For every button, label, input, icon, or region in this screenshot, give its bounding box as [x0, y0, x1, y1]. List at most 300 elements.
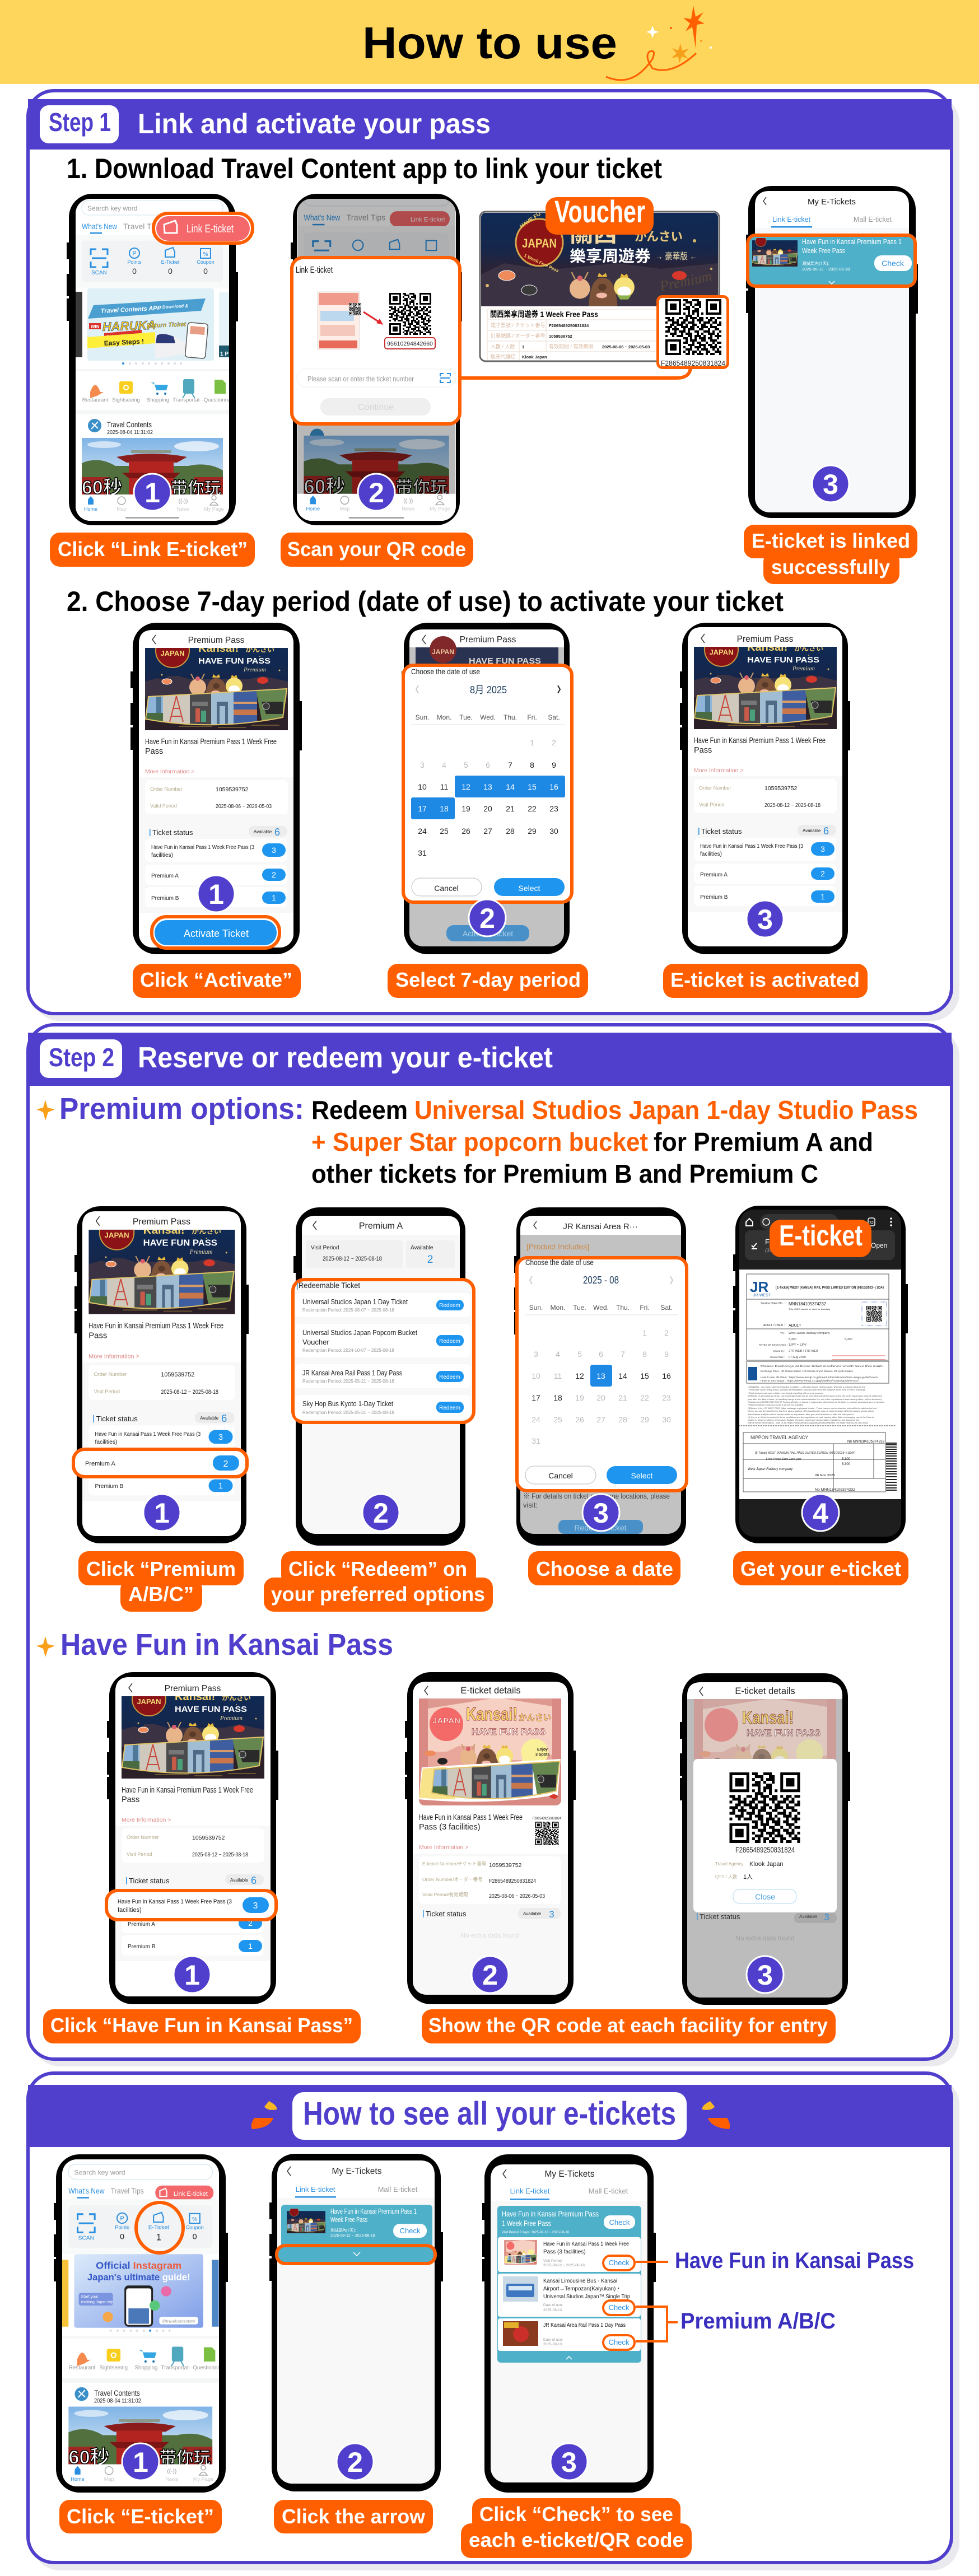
voucher image: → 豪華版 ←: [655, 251, 697, 262]
dialog: choose date of use: 7: [508, 760, 512, 769]
caption: click link e-ticket: Click “Link E-ticket”: [58, 538, 248, 561]
highlight: link e-ticket button: [153, 213, 253, 243]
header band with title pill: How to see all your e-tickets: [303, 2096, 676, 2132]
app home screen: Search key word: [87, 204, 137, 212]
dialog: choose the date: 3: [534, 1350, 538, 1359]
step number 2: 2: [482, 1959, 498, 1991]
voucher image: 關西: [570, 223, 617, 247]
app home screen: %: [192, 2216, 197, 2223]
screen: premium pass details activated: Order Number: [699, 785, 731, 791]
screen: premium pass: Have Fun in Kansai Premium Pass 1 Week Free: [122, 1786, 253, 1795]
screen: premium pass: Order Number: [127, 1835, 159, 1840]
dialog: link e-ticket: [292, 258, 460, 424]
phone: e-ticket details: No extra data found: [460, 1931, 520, 1939]
app home screen: Travel Tips: [123, 222, 161, 231]
text: premium options: other tickets for Premium B and Premium C: [311, 1159, 818, 1188]
caption: click check: Click “Check” to see: [479, 2503, 673, 2526]
caption: click premium a/b/c: A/B/C”: [128, 1583, 194, 1606]
app home screen: Easy Steps !: [104, 337, 144, 347]
app home screen: Restaurant: [82, 397, 109, 403]
caption: click have fun in kansai pass: Click “Have Fun in Kansai Pass”: [50, 2014, 353, 2037]
phone: choose a date: JR Kansai Area R···: [563, 1222, 638, 1231]
e-ticket document: Exchange Place : JR-Osaka Station / JR Kansai Airport Station / JR Kyoto Station: [761, 1370, 853, 1373]
e-ticket document: This eMCO cannot be used for boarding: [789, 1308, 830, 1310]
dialog: choose the date: 24: [532, 1415, 540, 1424]
dialog: choose the date: Tue.: [573, 1304, 586, 1312]
app home screen dimmed: [297, 184, 455, 521]
screen: premium pass details: Kansai!: [198, 642, 239, 655]
step number 3: 3: [593, 1497, 609, 1529]
dialog: choose the date: 8: [642, 1350, 647, 1359]
phone: click the arrow: Mall E-ticket: [378, 2185, 418, 2194]
step number 3: [582, 1494, 619, 1531]
dialog: choose date of use: 11: [440, 782, 448, 791]
phone: e-ticket details: F2865489250831824: [533, 1817, 562, 1821]
highlight: link e-ticket button: Link E-ticket: [187, 223, 234, 235]
voucher image: 人數 / 人数: [491, 343, 515, 349]
highlight: premium a row: 2: [223, 1459, 229, 1469]
e-ticket document: **Each person must need a ticket even though travelling with several persons.: [748, 1392, 823, 1394]
highlight: have fun in kansai pass row: Have Fun in Kansai Pass 1 Week Free Pass (3: [118, 1898, 232, 1905]
screen: premium pass details activated: Premium B: [700, 894, 728, 900]
e-ticket document: No MNN184105374232: [847, 1440, 884, 1444]
dialog: choose the date: 14: [618, 1371, 627, 1380]
e-ticket document: [4] Use of an Order is subject to these conditions and the regulations of each issuing office. After exchanging, use of the Pass is: [748, 1416, 874, 1418]
dialog: choose date of use: Cancel: [434, 884, 459, 893]
dialog: choose date of use: 3: [420, 760, 425, 769]
dialog: choose date of use: 19: [461, 804, 470, 813]
header band: step 1: Link and activate your pass: [138, 108, 491, 139]
screen: premium pass details: 1059539752: [216, 786, 249, 793]
e-ticket document: ADULT / CHILD :: [763, 1324, 785, 1327]
ticket card: Check: [400, 2227, 421, 2235]
ticket card: Week Free Pass: [330, 2216, 367, 2224]
pass artwork: pink: Kansai!: [466, 1704, 518, 1724]
highlight: redeemable ticket list: Redeem: [439, 1405, 460, 1411]
dialog: qr code: F2865489250831824: [735, 1846, 795, 1854]
caption: e-ticket is linked successfully: [744, 525, 917, 584]
caption: e-ticket is linked successfully: successfully: [771, 556, 890, 578]
step number 2: 2: [347, 2447, 363, 2478]
ticket list card: Visit Period:: [543, 2259, 563, 2263]
dialog: choose date of use: Mon.: [437, 713, 451, 721]
dialog: choose the date: 15: [640, 1371, 649, 1380]
app home screen: My Page: [204, 506, 224, 512]
screen: premium pass details activated: More Information >: [694, 767, 743, 774]
screen: premium pass details: Premium A: [151, 873, 179, 879]
highlighted ticket card: 測試周內(7天):: [802, 260, 829, 266]
caption: click the arrow: [274, 2500, 433, 2533]
phone: click have fun in kansai pass: [106, 1672, 278, 2004]
phone: e-ticket details: More Information >: [419, 1844, 468, 1851]
ticket card: [281, 2205, 432, 2263]
app home screen: ((·)): [179, 498, 188, 505]
screen: premium pass: Have Fun in Kansai Premium Pass 1 Week Free: [88, 1322, 223, 1331]
screen: premium pass details activated: かんさい: [794, 644, 823, 652]
dialog: choose the date: Mon.: [551, 1304, 565, 1312]
phone: choose a date: [514, 1207, 688, 1546]
dialog: link e-ticket: Please scan or enter the ticket number: [307, 375, 414, 383]
caption: click premium a/b/c: Click “Premium: [86, 1557, 236, 1580]
screen: premium pass details: Premium: [243, 666, 266, 673]
text: premium options: + Super Star popcorn bucket: [311, 1127, 648, 1156]
dialog: choose the date: [517, 1258, 687, 1491]
voucher image: かんさい: [635, 230, 683, 244]
phone: calendar, select period: HAVE FUN PASS: [469, 656, 541, 666]
highlight: premium a row: Premium A: [85, 1460, 115, 1467]
dialog: choose date of use: Thu.: [504, 713, 517, 721]
app home screen: 60秒: [82, 477, 122, 498]
dialog: choose the date: 1: [642, 1328, 647, 1337]
dialog: choose date of use: 5: [464, 760, 468, 769]
caption: click e-ticket: Click “E-ticket”: [67, 2505, 214, 2528]
e-ticket document: 08 Nov 2025: [815, 1474, 835, 1477]
app home screen: 0: [132, 267, 137, 276]
app home screen: WIN: [91, 324, 100, 329]
app home screen: Official Instagram: [96, 2260, 181, 2271]
phone: scan qr code dialog: [291, 184, 462, 525]
step number 4: 4: [813, 1497, 828, 1529]
header: yellow banner with title: [0, 0, 979, 84]
label: premium a/b/c: Premium A/B/C: [680, 2309, 836, 2334]
dialog: choose date of use: 30: [549, 827, 558, 836]
screen: premium pass details activated: 3: [821, 844, 825, 853]
dialog: choose the date: 19: [575, 1393, 584, 1402]
step number 1: [134, 474, 171, 511]
highlight: e-ticket circle: [136, 2202, 183, 2253]
dialog: choose date of use: 8: [530, 760, 534, 769]
text: premium options: for Premium A and: [654, 1127, 873, 1156]
screen: premium pass details: 6: [274, 827, 280, 838]
highlight: redeemable ticket list: Sky Hop Bus Kyoto 1-Day Ticket: [302, 1399, 393, 1408]
dialog: choose date of use: 25: [440, 827, 449, 836]
pass artwork: pink: 3 Spots: [535, 1753, 549, 1757]
phone: home screen, click link e-ticket: [67, 194, 253, 525]
e-ticket document: No MNN184105374232: [815, 1488, 856, 1492]
app home screen: Shopping: [135, 2365, 157, 2371]
screen: premium pass: Premium B: [128, 1944, 156, 1950]
voucher image: 關西樂享周遊券 1 Week Free Pass: [490, 310, 598, 319]
e-ticket document: 1JPY = 1JPY: [789, 1343, 807, 1347]
screen: premium pass details: Premium B: [151, 895, 179, 902]
step number 3: 3: [757, 1959, 773, 1991]
dialog: choose the date: Fri.: [640, 1304, 650, 1312]
screen: premium pass details: Ticket status: [152, 828, 193, 837]
highlight: redeemable ticket list: Universal Studios Japan Popcorn Bucket: [302, 1328, 417, 1337]
e-ticket document: [E-Ticket] WEST (KANSAI) RAIL PASS LIMITED EDITION (01/10/2023~) 1DAY: [776, 1286, 884, 1290]
screen: premium pass: Premium: [189, 1249, 213, 1256]
screen: premium pass details activated: JAPAN: [709, 648, 734, 656]
e-ticket document: Issued by :: [773, 1350, 785, 1352]
phone: e-ticket details: F2865489250831824: [489, 1878, 536, 1884]
screen: premium pass details activated: Premium A: [700, 872, 728, 878]
dialog: choose the date: 17: [532, 1393, 540, 1402]
screen: premium pass details: 2025-08-06 ~ 2026-05-03: [216, 803, 272, 810]
app home screen: What's New: [68, 2187, 105, 2196]
screen: premium pass details: facilities): [151, 852, 173, 858]
step number 3: [812, 465, 849, 502]
e-ticket document: Five Three Zero Zero yen: [766, 1458, 801, 1461]
dialog: link e-ticket: Link E-ticket: [296, 265, 333, 275]
dialog: choose the date: 30: [662, 1415, 671, 1424]
e-ticket document: West Japan Railway company: [789, 1332, 830, 1335]
screen: premium pass: 1: [248, 1942, 253, 1950]
screen: premium pass: HAVE FUN PASS: [175, 1705, 247, 1714]
screen: premium pass: Have Fun in Kansai Pass 1 Week Free Pass (3: [95, 1431, 201, 1438]
button: activate ticket: Activate Ticket: [184, 928, 249, 939]
step number 3: 3: [757, 904, 773, 935]
header band with title pill: [28, 2085, 952, 2147]
heading: have fun in kansai pass: Have Fun in Kansai Pass: [60, 1628, 393, 1662]
voucher image: Premium: [658, 268, 714, 295]
dialog: choose date of use: 16: [549, 782, 558, 791]
dialog: choose the date: 7: [621, 1350, 625, 1359]
ticket list card: [497, 2206, 641, 2363]
highlight: redeemable ticket list: Redemption Period: 2025-05-21 ~ 2025-08-18: [302, 1410, 394, 1415]
app home screen dimmed: 2025-08-04 11:31:02: [330, 436, 377, 442]
dialog: link e-ticket: 95610294842660: [387, 340, 433, 347]
phone: show qr code: Kansai!: [742, 1707, 794, 1728]
phone: choose a date: ※ For details on ticket exchange locations, please: [523, 1492, 670, 1500]
screen: premium pass details: 1: [272, 893, 276, 902]
e-ticket document: JR: [750, 1278, 768, 1295]
voucher image: 1059539752: [549, 334, 572, 339]
app home screen: Search key word: [74, 2168, 125, 2176]
phone: calendar, select period: JAPAN: [432, 648, 454, 656]
dialog: choose the date: Choose the date of use: [525, 1258, 594, 1267]
dialog: choose the date: 29: [640, 1415, 649, 1424]
dialog: choose date of use: 23: [549, 804, 558, 813]
dialog: qr code: [693, 1759, 837, 1912]
step number 1: 1: [184, 1959, 200, 1991]
dialog: choose the date: 12: [575, 1371, 584, 1380]
dialog: choose date of use: 27: [483, 827, 492, 836]
phone: show qr code: Ticket status: [700, 1912, 740, 1921]
e-ticket document: [5]For further information , visit us at: https://www.westjr.co.jp/global/en/ticket/pass/ OR https://kaniou.ml-hitt.ne.jp/: [748, 1421, 869, 1424]
app home screen dimmed: Travel Tips: [347, 214, 385, 223]
voucher image: 1 Week Free Pass: [523, 253, 560, 274]
phone: activated: [680, 623, 850, 954]
voucher image: 樂享周遊券: [570, 248, 651, 265]
screen: premium pass details: Have Fun in Kansai Pass 1 Week Free Pass (3: [151, 844, 254, 851]
ticket list card: 1 Week Free Pass: [502, 2219, 551, 2228]
dialog: choose date of use: 10: [418, 782, 427, 791]
app home screen: 带你玩: [159, 2449, 211, 2468]
highlight: check buttons: Check: [609, 2338, 630, 2346]
phone: e-ticket details: [405, 1672, 576, 2004]
caption: show the qr code: Show the QR code at each facility for entry: [428, 2014, 828, 2037]
app home screen dimmed: My Page: [430, 506, 450, 512]
screen: premium pass details activated: facilities): [700, 851, 722, 857]
step number 1: [198, 875, 235, 912]
phone: calendar, select period: Premium Pass: [460, 635, 516, 645]
e-ticket document: [1]Eligibility : You must meet the following condition — A foreign tourist visiting Japan, who has a passport bearing the: [748, 1385, 866, 1388]
step number 3: 3: [561, 2447, 577, 2478]
app home screen: exciting Japan trip: [81, 2300, 113, 2304]
dialog: choose the date: 20: [596, 1393, 605, 1402]
dialog: choose date of use: Choose the date of use: [411, 667, 480, 676]
app home screen: Coupon: [186, 2224, 204, 2230]
e-ticket document: TO :: [780, 1332, 785, 1334]
caption: choose a date: [528, 1551, 680, 1585]
app home screen dimmed: Map: [339, 506, 349, 512]
voucher image: 1: [522, 344, 524, 349]
phone: redeemable tickets: Visit Period: [311, 1245, 339, 1251]
e-ticket document: NIPPON TRAVEL AGENCY: [750, 1435, 808, 1440]
caption: e-ticket is activated: [663, 964, 868, 998]
highlight: check buttons: Check: [609, 2258, 630, 2267]
phone: e-ticket details: Pass (3 facilities): [419, 1823, 481, 1832]
screen: premium pass: 1059539752: [192, 1835, 225, 1841]
phone: ticket list with check buttons: [482, 2154, 656, 2493]
phone: e-ticket details: Ticket status: [426, 1910, 467, 1918]
caption: click check: each e-ticket/QR code: [469, 2528, 684, 2551]
ticket list card: Date of use:: [543, 2338, 563, 2342]
phone: redeemable tickets: Available: [411, 1245, 433, 1251]
app home screen: Travel Contents APP: [101, 305, 162, 315]
app home screen: What's New: [82, 222, 118, 231]
header band: step 1: Step 1: [49, 108, 111, 137]
screen: premium pass: HAVE FUN PASS: [143, 1238, 217, 1248]
pass artwork: pink: JAPAN: [432, 1716, 460, 1725]
app home screen: Travel Contents: [107, 420, 152, 429]
callout bracket: premium a/b/c: [636, 2307, 678, 2341]
voucher image: HAVE FU: [519, 211, 542, 230]
phone: show qr code: Available: [799, 1914, 818, 1919]
dialog: choose date of use: 4: [442, 760, 446, 769]
e-ticket document: [3]Refund of ALL JR WEST PASS (After exchange to physical tickets) : These passes can be refunded only within the valid period and: [748, 1407, 877, 1410]
e-ticket document: with stations staff) No refund can be made for any reason after you use the tickets or after the valid period.: [748, 1413, 854, 1416]
app home screen: 1 P: [220, 351, 229, 357]
ticket list card: 2025-08-12 ~ 2025-08-18: [543, 2264, 585, 2267]
phone: ticket list with check buttons: Mall E-ticket: [589, 2187, 628, 2195]
e-ticket document: Service Order No. :: [761, 1302, 785, 1305]
app home screen: Map: [116, 506, 127, 512]
screen: premium pass: Pass: [122, 1795, 139, 1804]
voucher qr code: F2865489250831824: [661, 359, 725, 367]
phone: show qr code: No extra data found: [735, 1934, 795, 1942]
step number 1: [122, 2443, 159, 2480]
screen: premium pass: 6: [221, 1412, 227, 1424]
phone: e-ticket details: 1059539752: [489, 1862, 522, 1869]
caption: select 7-day period: Select 7-day period: [395, 968, 581, 991]
dialog: qr code: Travel Agency: [715, 1861, 743, 1866]
app home screen dimmed: 带你玩: [395, 478, 447, 497]
icon: star: [36, 1100, 55, 1121]
app home screen: HARUKA: [102, 318, 156, 334]
app home screen dimmed: Link E-ticket: [411, 217, 445, 223]
dialog: qr code: 1人: [743, 1874, 753, 1880]
screen: premium pass details activated: Ticket status: [701, 827, 742, 836]
highlight: have fun in kansai pass row: [106, 1891, 276, 1920]
screen: premium pass: Available: [230, 1878, 249, 1883]
app home screen: Restaurant: [69, 2365, 96, 2371]
highlight: redeemable ticket list: Redeem: [439, 1374, 460, 1380]
app home screen: Return Ticket: [147, 321, 187, 329]
dialog: choose the date: 11: [554, 1371, 562, 1380]
ticket list card: JR Kansai Area Rail Pass 1 Day Pass: [543, 2322, 626, 2328]
voucher image: F2865489250831824: [549, 323, 589, 328]
caption: click redeem: Click “Redeem” on: [288, 1557, 467, 1580]
phone: e-ticket linked: My E-Tickets: [808, 197, 856, 207]
dialog: choose the date: 2: [664, 1328, 669, 1337]
ticket list card: Pass (3 facilities): [543, 2249, 586, 2255]
e-ticket document: Partial refunds for products sold as a set are not available.: [748, 1403, 804, 1406]
screen: premium pass details activated: Premium Pass: [737, 634, 794, 644]
step number 3: 3: [823, 469, 838, 500]
screen: premium pass details: Available: [254, 829, 272, 834]
screen: premium pass details: [139, 630, 293, 913]
e-ticket document: [E-Ticket] WEST (KANSAI) RAIL PASS LIMITED EDITION (01/10/2023~) 1DAY: [754, 1452, 855, 1455]
dialog: choose the date: 18: [553, 1393, 562, 1402]
step number 2: [358, 474, 395, 511]
screen: premium pass details: 3: [272, 846, 276, 855]
screen: premium pass: Pass: [88, 1332, 107, 1341]
dialog: choose date of use: 18: [440, 804, 449, 813]
app home screen: Map: [104, 2476, 114, 2482]
e-ticket document: West Japan Railway company: [748, 1468, 793, 1471]
ticket list card: Universal Studios Japan™ Single Trip: [543, 2294, 630, 2300]
voucher image: Klook Japan: [522, 354, 547, 360]
step number 3: [747, 1956, 784, 1993]
highlight: redeemable ticket list: Redemption Period: 2025-05-21 ~ 2025-08-18: [302, 1379, 394, 1384]
phone: ticket list with check buttons: My E-Tickets: [545, 2169, 595, 2179]
dialog: choose the date: 9: [664, 1350, 669, 1359]
caption: get your e-ticket: Get your e-ticket: [740, 1557, 901, 1580]
dialog: choose the date: 27: [596, 1415, 605, 1424]
screen: premium pass: Premium Pass: [165, 1684, 221, 1693]
screen: premium pass: Visit Period: [127, 1851, 152, 1857]
app home screen: Japan's ultimate guide!: [87, 2272, 190, 2283]
dialog: choose date of use: Wed.: [480, 713, 496, 721]
app home screen: 带你玩: [171, 479, 221, 498]
header band: step 1: [28, 99, 952, 150]
screen: premium pass details: JAPAN: [160, 649, 185, 657]
dialog: choose date of use: 28: [506, 827, 515, 836]
phone: home with e-ticket count: [54, 2154, 228, 2493]
ticket list card: Date of use:: [543, 2303, 563, 2307]
dialog: choose date of use: 1: [530, 738, 534, 747]
step number 2: 2: [479, 903, 495, 934]
panel: step 2 reserve or redeem: [28, 1025, 959, 2066]
screen: premium pass details: Valid Period: [150, 803, 177, 809]
step number 2: [472, 1956, 509, 1993]
caption: click activate: [133, 964, 301, 998]
voucher image: 2025-08-06 ~ 2026-05-03: [602, 344, 650, 349]
dialog: qr code: Close: [755, 1892, 775, 1901]
header band: step 2: Step 2: [49, 1043, 114, 1072]
voucher image: 電子票號 / チケット番号: [491, 322, 546, 328]
dialog: choose the date: 23: [662, 1393, 671, 1402]
pass artwork: pink: Enjoy: [537, 1748, 548, 1752]
screen: premium pass details activated: [688, 627, 842, 912]
screen: premium pass details: Have Fun in Kansai Premium Pass 1 Week Free: [145, 738, 277, 746]
voucher image: 販売代理店: [491, 353, 516, 360]
highlight: redeemable ticket list: Redemption Period: 2024-10-07 ~ 2025-08-18: [302, 1348, 394, 1353]
voucher image: JAPAN: [522, 236, 557, 250]
phone: e-ticket linked: Mall E-ticket: [854, 216, 892, 223]
e-ticket document: "Temporary Visitor" entry status, stamped at immigration, and who can show the passport at the time of PASS exchange: [748, 1388, 866, 1391]
voucher image: [460, 194, 728, 378]
phone: click the arrow: My E-Tickets: [332, 2167, 382, 2176]
screen: premium pass: Premium: [220, 1715, 243, 1721]
phone: e-ticket linked: Link E-ticket: [772, 216, 811, 223]
phone: e-ticket details: E-ticket details: [460, 1686, 521, 1696]
dialog: choose date of use: Select: [519, 884, 540, 893]
screen: premium pass details activated: Visit Period: [699, 802, 724, 808]
screen: premium pass: かんさい: [192, 1227, 221, 1235]
app home screen: Coupon: [197, 259, 215, 265]
